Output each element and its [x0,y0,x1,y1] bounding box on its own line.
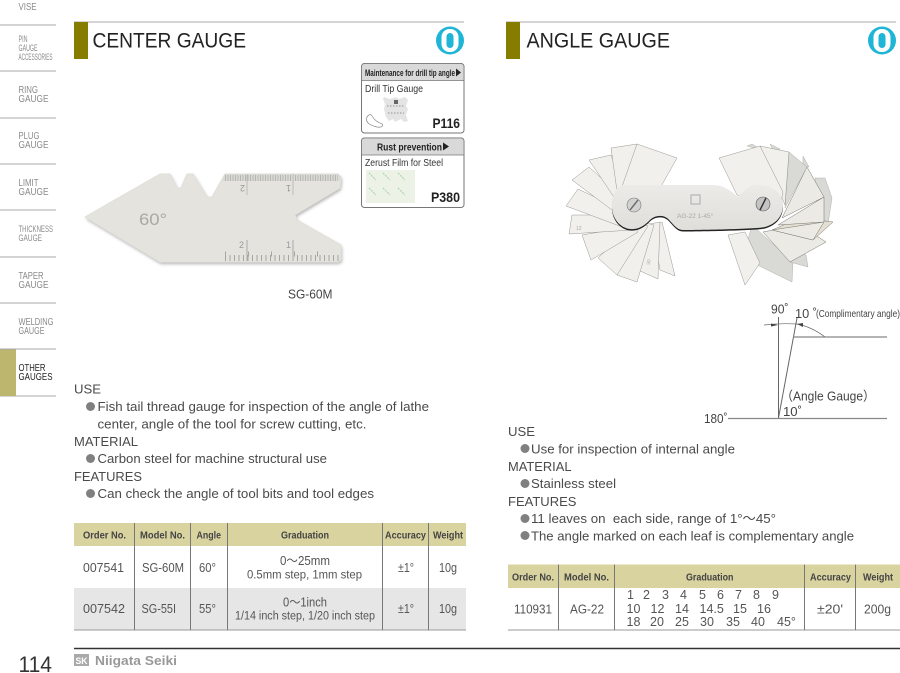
text block: center gauge description [74,382,429,501]
graduation values: 1 [627,588,634,602]
sidebar navigation: GAUGE [18,43,38,53]
text block: center gauge description: Can check the angle of tool bits and tool edges [98,486,375,501]
callout: drill tip gauge: Maintenance for drill tip angle [365,68,455,79]
graduation values: 8 [753,588,760,602]
center gauge photo: 2 [239,240,244,250]
text block: center gauge description: Carbon steel for machine structural use [98,451,327,466]
graduation values: 18 [626,615,640,629]
table: center gauge specs: Weight [433,530,464,542]
graduation values: 12 [650,602,664,616]
table: center gauge specs [74,523,466,630]
sidebar navigation: THICKNESS [18,224,53,234]
graduation values: 2 [643,588,650,602]
table: center gauge specs: Model No. [140,530,185,542]
table: angle gauge specs: Weight [863,572,894,584]
sidebar navigation: GAUGE [18,326,45,337]
text block: angle gauge description: The angle marked on each leaf is complementary angle [531,528,854,544]
gauge body plate [612,185,783,232]
table: center gauge specs: 0～1inch [283,596,327,610]
sidebar navigation: ACCESSORIES [18,52,52,62]
sidebar navigation: RING [18,85,38,96]
graduation values: 40 [751,615,765,629]
sidebar navigation: GAUGE [18,140,49,151]
text block: center gauge description: USE [74,382,101,396]
text block: angle gauge description: Use for inspection of internal angle [531,442,735,456]
left fan of leaves [566,144,677,282]
callout: rust prevention: Zerust Film for Steel [365,158,443,169]
center gauge photo: 60° [139,210,167,229]
table: center gauge specs: 55° [199,602,216,616]
footer [18,648,900,673]
text block: angle gauge description: FEATURES [508,494,577,509]
graduation values: 14.5 [700,602,724,616]
graduation values: 25 [675,615,689,629]
graduation values: 5 [699,588,706,602]
text block: angle gauge description: 11 leaves on each side, range of 1°～45° [531,511,776,526]
icon: stock badge right [868,26,896,54]
table: center gauge specs: ±1° [398,602,414,616]
angle diagram: 10 ˚ [795,306,817,321]
sidebar navigation: PLUG [18,131,40,142]
graduation values: 16 [757,602,771,616]
graduation values: 9 [772,588,779,602]
angle gauge photo [566,144,833,285]
table: center gauge specs: 10g [439,561,457,575]
sidebar navigation: GAUGE [18,94,49,105]
center gauge photo: 1 [286,183,291,193]
callout: rust prevention: P380 [431,189,460,205]
icon: right screw [756,197,770,211]
graduation values: 35 [726,615,740,629]
text block: angle gauge description [508,424,854,544]
table: center gauge specs: 60° [199,561,216,575]
icon: zerust film swatch [366,170,415,203]
graduation values: 10 [626,602,640,616]
text block: angle gauge description: Stainless steel [531,476,616,491]
sidebar navigation: VISE [18,2,37,13]
callout: rust prevention: Rust prevention [377,142,442,154]
graduation values [626,588,796,629]
sidebar navigation: TAPER [18,271,44,282]
logo: SK [76,656,88,666]
table: angle gauge specs: Model No. [564,572,609,584]
table: center gauge specs: 007541 [83,561,124,575]
active tab: other gauges: OTHER [18,363,46,374]
angle diagram: 180˚ [704,411,728,426]
sidebar navigation: GAUGE [18,187,49,198]
callout: drill tip gauge [362,64,464,133]
table: center gauge specs: SG-60M [142,561,184,575]
table: center gauge specs: 10g [439,602,457,616]
graduation values: 20 [650,615,664,629]
left fan of leaves: 12 [576,226,582,232]
text block: center gauge description: Fish tail thread gauge for inspection of the angle of lathe [98,399,429,414]
table: angle gauge specs [508,564,900,630]
logo: Niigata Seiki [95,653,177,668]
table: center gauge specs: Angle [196,530,221,542]
text block: center gauge description: center, angle of the tool for screw cutting, etc. [98,416,366,432]
table: angle gauge specs: AG-22 [570,602,604,616]
table: center gauge specs: SG-55I [142,602,176,616]
active tab: other gauges [0,350,53,396]
heading: angle gauge: ANGLE GAUGE [526,30,670,52]
graduation values: 45° [777,615,796,629]
graduation values: 4 [680,588,687,602]
graduation values: 30 [700,615,714,629]
icon: left screw [627,198,641,212]
angle diagram: （Angle Gauge） [781,388,875,404]
sidebar navigation: PIN [18,34,28,44]
text block: angle gauge description: USE [508,424,535,439]
table: angle gauge specs: 110931 [514,602,552,616]
table: center gauge specs: ±1° [398,561,414,575]
callout: drill tip gauge: P116 [432,115,460,131]
caption: SG-60M: SG-60M [288,286,332,302]
angle diagram: 90˚ [771,302,788,316]
callout: rust prevention [362,138,464,208]
table: center gauge specs: 007542 [83,602,125,616]
callout: drill tip gauge: Drill Tip Gauge [365,84,423,95]
table: center gauge specs: Accuracy [385,530,426,542]
table: center gauge specs: Order No. [83,530,126,542]
graduation values: 7 [735,588,742,602]
heading: center gauge: CENTER GAUGE [92,30,246,52]
heading: angle gauge [506,22,896,59]
graduation values: 3 [662,588,669,602]
center gauge photo: 1 [286,240,291,250]
graduation values: 14 [675,602,689,616]
heading: center gauge [74,22,464,59]
table: angle gauge specs: Accuracy [810,572,851,584]
center gauge photo: 2 [240,183,245,193]
sidebar navigation: GAUGE [18,280,49,291]
text block: center gauge description: FEATURES [74,469,142,484]
icon: stock badge left [436,26,464,54]
angle diagram: 10˚ [783,404,802,419]
table: angle gauge specs: Graduation [686,572,734,584]
graduation values: 6 [717,588,724,602]
table: angle gauge specs: Order No. [512,572,554,584]
icon: drill tip gauge thumbnail [366,97,408,127]
sidebar navigation [0,2,56,396]
table: angle gauge specs: ±20' [817,602,843,616]
text block: angle gauge description: MATERIAL [508,459,572,474]
left fan of leaves: 30 [646,259,652,265]
sidebar navigation: WELDING [18,317,54,328]
active tab: other gauges: GAUGES [18,372,53,383]
angle diagram [704,302,900,426]
table: center gauge specs: 0.5mm step, 1mm step [247,570,362,582]
right fan of leaves [719,144,833,285]
table: angle gauge specs: 200g [864,602,891,616]
sidebar navigation: GAUGE [18,233,42,243]
center gauge photo [85,174,342,264]
sidebar navigation: LIMIT [18,178,38,189]
table: center gauge specs: 0～25mm [280,554,330,568]
table: center gauge specs: Graduation [281,530,329,542]
gauge body plate: AG-22 1-45° [677,212,714,220]
table: center gauge specs: 1/14 inch step, 1/20 inch step [235,610,375,622]
graduation values: 15 [733,602,747,616]
text block: center gauge description: MATERIAL [74,434,138,449]
